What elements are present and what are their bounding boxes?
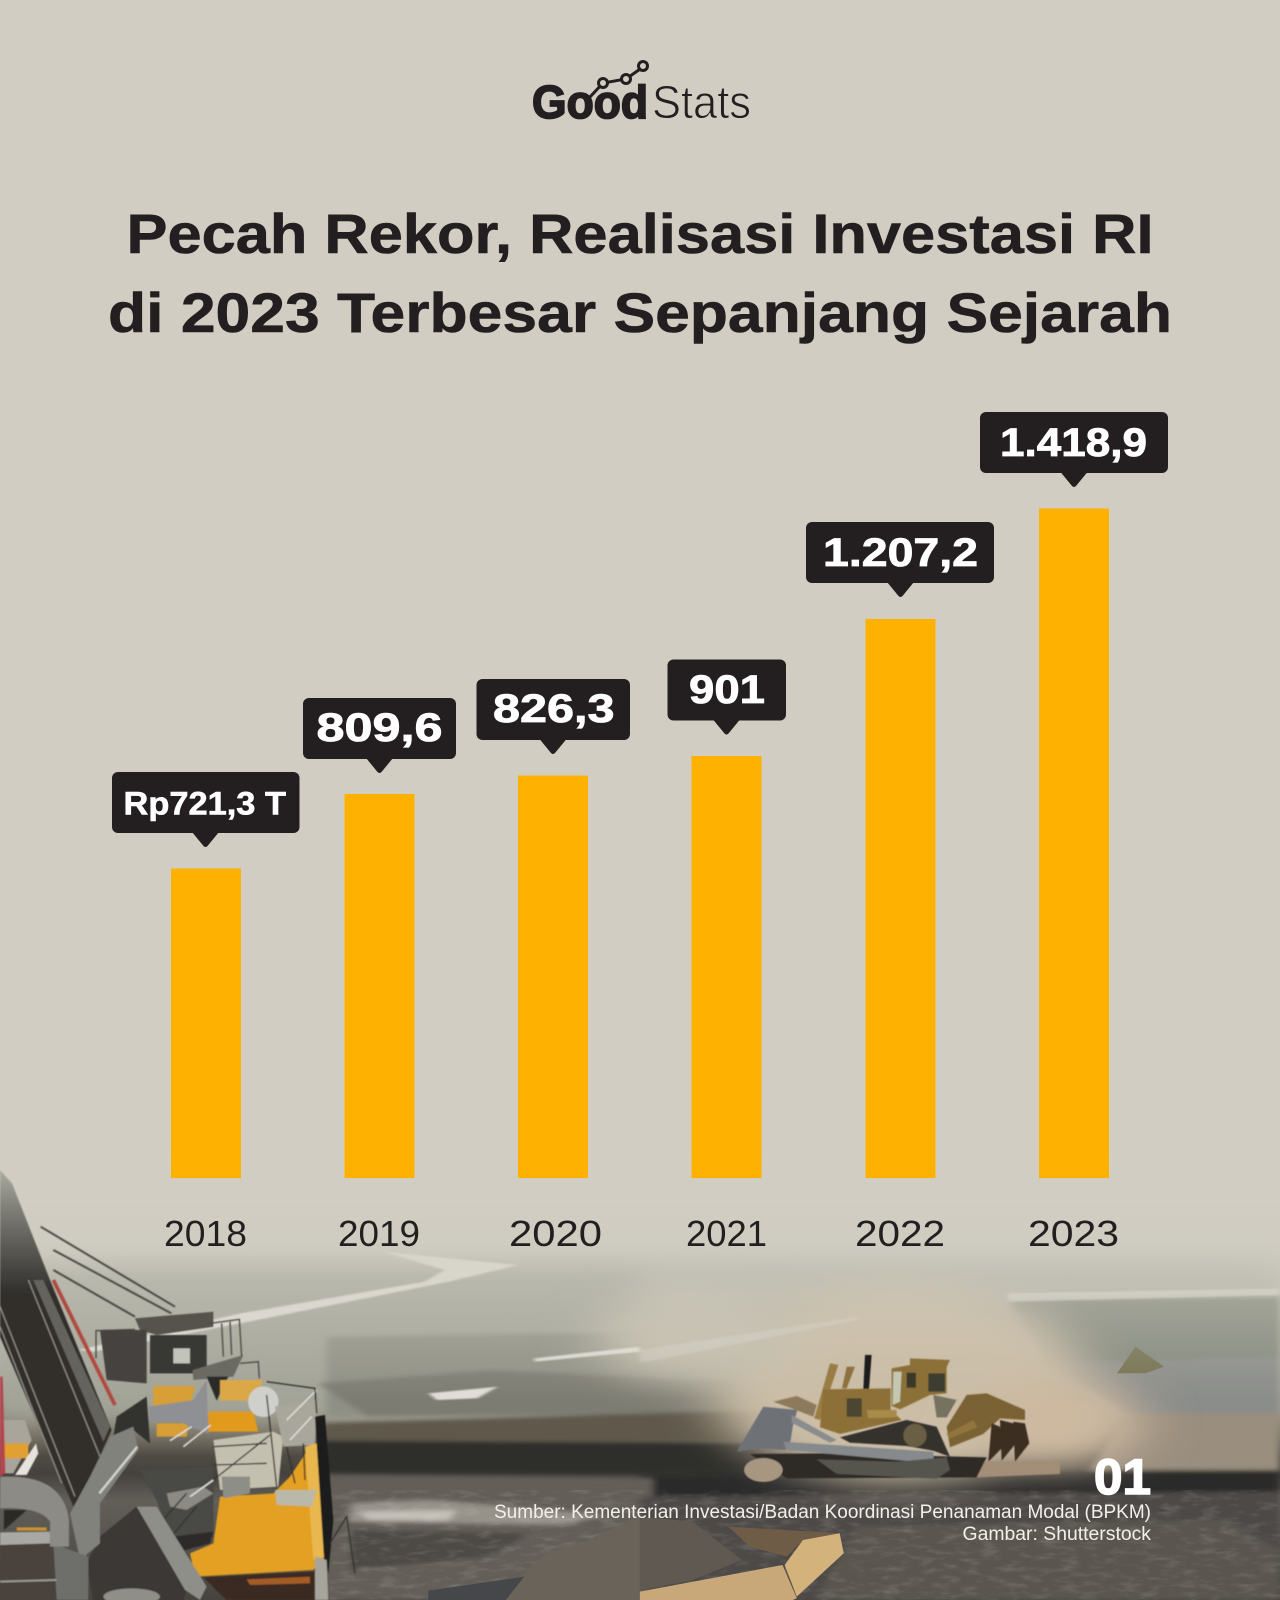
logo wordmark	[532, 76, 751, 128]
year labels	[164, 1213, 1119, 1254]
lifting arms and exhaust	[814, 1363, 838, 1420]
deck roof	[213, 1432, 283, 1490]
mid ground scenery	[0, 1252, 1279, 1600]
callout: 2020 value: 826,3	[493, 687, 614, 731]
stairs	[140, 1467, 213, 1547]
ground shadow and dust	[977, 1462, 1060, 1477]
year labels: 2021	[686, 1213, 767, 1254]
bar chart	[112, 412, 1168, 1254]
source credit: Gambar: Shutterstock	[962, 1524, 1152, 1545]
haze over the photo	[0, 1150, 1280, 1400]
distant excavator	[1117, 1347, 1164, 1373]
year labels: 2019	[338, 1213, 420, 1254]
background gap and rear structure	[0, 1420, 32, 1473]
callout: 2023 value: 1.418,9	[1000, 421, 1147, 465]
callout: 2021 value	[668, 660, 786, 734]
callout: 2022 value	[806, 522, 994, 597]
grey column with arch	[148, 1380, 208, 1433]
bulldozer	[737, 1355, 1060, 1482]
ripper	[947, 1393, 1025, 1447]
source credit: Sumber: Kementerian Investasi/Badan Koordinasi Penanaman Modal (BPKM)	[494, 1502, 1151, 1523]
ground texture	[330, 1490, 1280, 1600]
year labels: 2022	[855, 1213, 945, 1254]
boom	[0, 1170, 112, 1510]
fan	[248, 1386, 279, 1417]
pivot	[113, 1397, 150, 1443]
upper deck	[135, 1312, 213, 1335]
callout: 2021 value: 901	[689, 668, 765, 712]
callout: 2018 value: Rp721,3 T	[124, 786, 286, 822]
bar: 2022	[866, 619, 936, 1178]
cab	[892, 1358, 950, 1409]
logo chart line icon	[590, 62, 648, 97]
bar: 2021	[692, 756, 762, 1178]
dipper arm	[70, 1427, 138, 1560]
bar: 2023	[1039, 508, 1109, 1178]
bar: 2020	[518, 776, 588, 1178]
lower boom	[87, 1507, 187, 1600]
page number: 01	[1094, 1449, 1151, 1505]
dust cloud behind bulldozer	[710, 1283, 1085, 1483]
machine house strips	[153, 1386, 195, 1407]
background photo: mining landscape	[0, 1150, 1280, 1600]
callout: 2019 value	[303, 698, 456, 773]
dump truck and rock pile	[428, 1517, 844, 1600]
lower track	[817, 1457, 950, 1479]
rear rack	[773, 1396, 817, 1417]
callout: 2023 value	[980, 412, 1168, 487]
year labels: 2018	[164, 1213, 247, 1254]
red hoist ropes	[53, 1280, 115, 1405]
bucket and teeth	[0, 1543, 67, 1600]
haul road and reflections	[78, 1252, 1279, 1400]
source credit	[494, 1502, 1152, 1545]
callout: 2019 value: 809,6	[316, 706, 442, 750]
logo: GoodStats	[532, 62, 751, 128]
logo wordmark: Good	[532, 76, 648, 128]
rear housing	[933, 1395, 957, 1417]
logo wordmark: Stats	[652, 76, 751, 128]
title	[108, 202, 1172, 344]
body	[820, 1388, 902, 1434]
year labels: 2023	[1028, 1213, 1119, 1254]
year labels: 2020	[509, 1213, 602, 1254]
upper track and sprocket	[840, 1420, 950, 1457]
title: Pecah Rekor, Realisasi Investasi RI	[126, 202, 1154, 265]
callout: 2020 value	[476, 679, 630, 754]
title: di 2023 Terbesar Sepanjang Sejarah	[108, 281, 1172, 344]
bar: 2018	[171, 868, 241, 1178]
excavator	[0, 1170, 355, 1600]
callout: 2022 value: 1.207,2	[823, 531, 978, 575]
orange hull	[190, 1443, 325, 1577]
bar: 2019	[344, 794, 414, 1178]
blade	[737, 1407, 797, 1452]
cables	[41, 1227, 175, 1317]
callout: 2018 value	[112, 772, 300, 847]
